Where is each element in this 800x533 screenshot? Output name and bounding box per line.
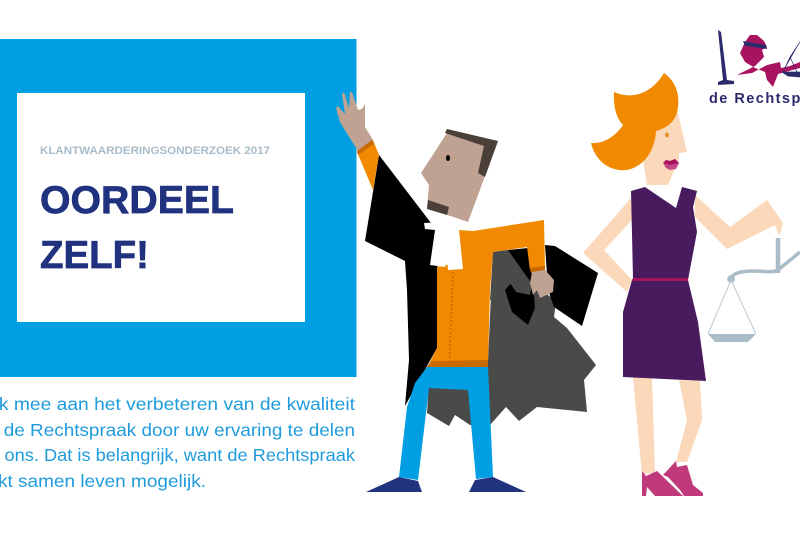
left leg	[633, 377, 655, 475]
illustration: woman with scales	[583, 73, 800, 496]
white collar	[424, 222, 463, 270]
face and neck	[643, 113, 687, 185]
panel: blue title frame	[0, 39, 356, 377]
pan	[708, 334, 756, 342]
pan strings	[708, 280, 756, 334]
raised hand	[336, 92, 373, 151]
logo sword	[718, 30, 734, 85]
logo scale	[782, 42, 800, 77]
right arm	[695, 195, 783, 249]
scale beam	[731, 252, 800, 278]
hair	[445, 129, 498, 177]
dress belt	[633, 278, 688, 281]
gown lining: grey cape	[427, 250, 596, 426]
title: OORDEEL	[40, 179, 234, 222]
gown: left sleeve and body	[365, 155, 440, 406]
hair	[591, 73, 678, 170]
beard	[427, 200, 449, 215]
illustration: judge man with gown	[336, 92, 598, 492]
trousers	[399, 367, 493, 480]
logo blindfold	[743, 41, 767, 49]
orange shirt	[430, 220, 545, 362]
logo figure	[737, 35, 800, 87]
purple dress	[623, 187, 706, 381]
eye	[665, 132, 669, 138]
subtitle: KLANTWAARDERINGSONDERZOEK 2017	[40, 145, 270, 157]
gown: inner fold	[505, 248, 535, 325]
eye	[446, 155, 450, 161]
lowered hand	[530, 270, 554, 298]
shirt cuff	[530, 266, 545, 273]
lips	[663, 159, 679, 170]
right leg	[676, 380, 702, 462]
right shoe	[469, 477, 526, 492]
head	[421, 133, 498, 222]
title: ZELF!	[40, 234, 149, 277]
right shoe	[663, 461, 703, 496]
title	[40, 179, 234, 277]
belt	[427, 360, 488, 367]
left arm	[583, 198, 632, 292]
gown: right sleeve	[545, 245, 598, 326]
scale hook	[776, 238, 780, 273]
raised sleeve	[357, 140, 379, 190]
intro text block	[0, 394, 355, 491]
shirt button line	[450, 272, 453, 358]
left shoe	[642, 471, 683, 496]
logo: de Rechtspraak	[709, 30, 800, 107]
scales	[708, 238, 800, 342]
beam pivot	[727, 275, 735, 283]
left shoe	[366, 477, 422, 492]
raised sleeve cuff	[357, 140, 374, 155]
grey fold overlay	[490, 250, 532, 300]
